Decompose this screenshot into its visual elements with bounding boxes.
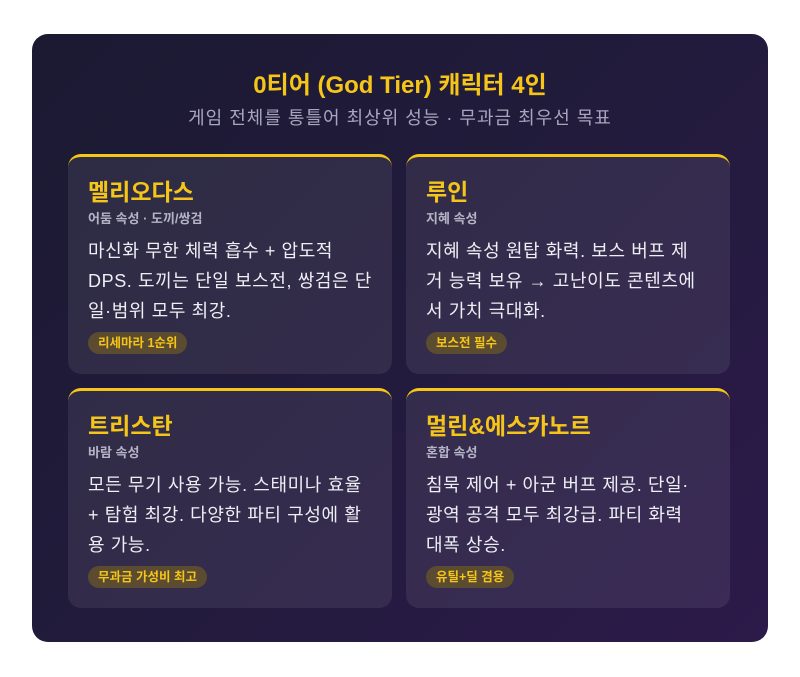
card: 트리스탄 (68, 388, 392, 608)
card: 멀린&에스카노르: 혼합 속성 (426, 445, 477, 460)
tag: 유틸+딜 겸용 (436, 570, 504, 584)
card: 멀린&에스카노르: 대폭 상승. (426, 535, 506, 555)
card: 트리스탄: 용 가능. (88, 535, 151, 555)
card: 트리스탄: 모든 무기 사용 가능. 스태미나 효율 (88, 475, 362, 495)
tag: 보스전 필수 (436, 336, 497, 350)
card: 트리스탄: 트리스탄 (88, 413, 173, 439)
card: 멜리오다스 (68, 154, 392, 374)
card: 트리스탄: 바람 속성 (88, 445, 139, 460)
subtitle: 게임 전체를 통틀어 최상위 성능 · 무과금 최우선 목표 (188, 108, 612, 128)
tag: 리세마라 1순위 (98, 336, 177, 350)
card: 루인: 거 능력 보유 → 고난이도 콘텐츠에 (426, 271, 696, 291)
card: 멜리오다스: 어둠 속성 · 도끼/쌍검 (88, 211, 202, 226)
card: 루인 (406, 154, 730, 374)
card: 멀린&에스카노르: 침묵 제어 + 아군 버프 제공. 단일· (426, 475, 689, 495)
title: 0티어 (God Tier) 캐릭터 4인 (253, 72, 547, 99)
card: 루인: 서 가치 극대화. (426, 301, 546, 321)
card: 멜리오다스: 일·범위 모두 최강. (88, 301, 232, 321)
card: 멀린&에스카노르 (406, 388, 730, 608)
card: 멜리오다스: 마신화 무한 체력 흡수 + 압도적 (88, 241, 333, 261)
tag (88, 332, 187, 354)
tag (426, 332, 507, 354)
card: 멜리오다스: 멜리오다스 (88, 179, 194, 205)
card: 루인: 지혜 속성 원탑 화력. 보스 버프 제 (426, 241, 688, 261)
tag: 무과금 가성비 최고 (98, 570, 197, 584)
card: 멜리오다스: DPS. 도끼는 단일 보스전, 쌍검은 단 (88, 271, 372, 291)
card: 루인: 루인 (426, 179, 468, 205)
card: 루인: 지혜 속성 (426, 211, 477, 226)
card: 트리스탄: + 탐험 최강. 다양한 파티 구성에 활 (88, 505, 361, 525)
card: 멀린&에스카노르: 광역 공격 모두 최강급. 파티 화력 (426, 505, 683, 525)
tag (88, 566, 207, 588)
tag (426, 566, 514, 588)
card: 멀린&에스카노르: 멀린&에스카노르 (426, 413, 591, 439)
